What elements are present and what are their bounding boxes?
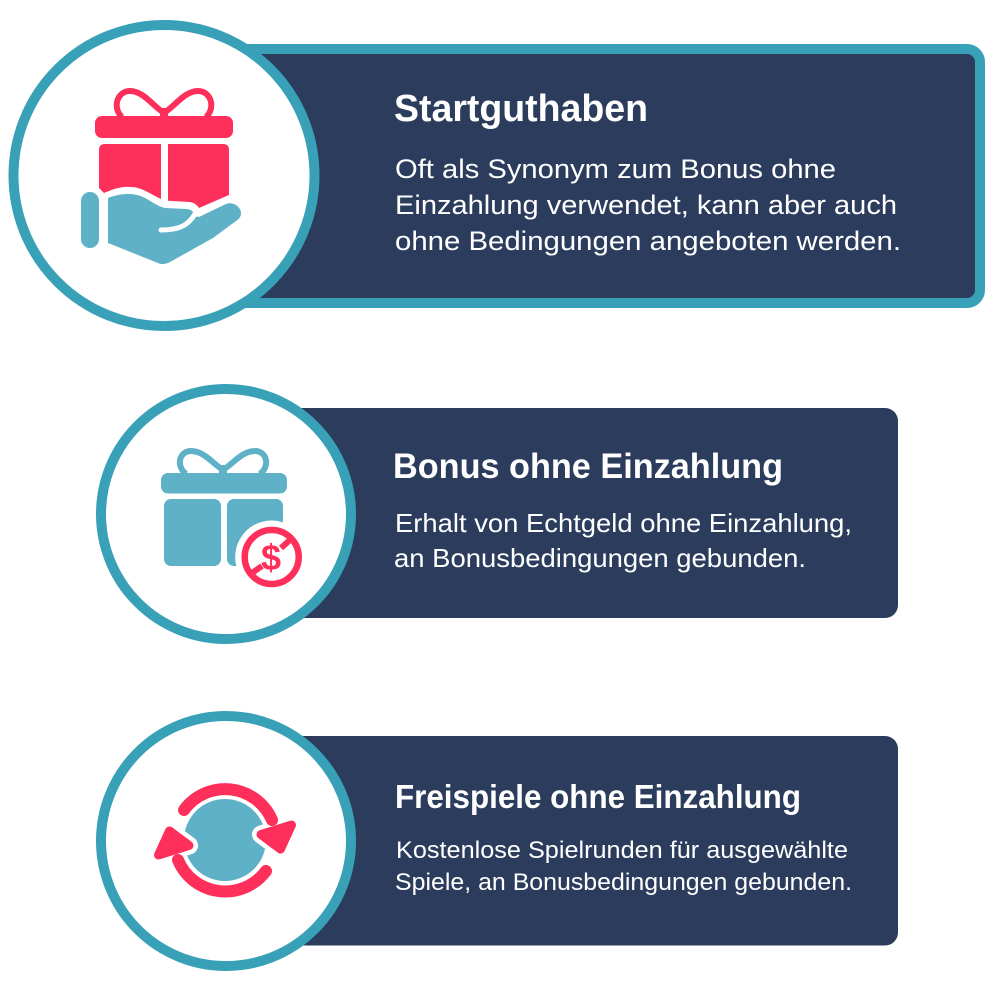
text block: Startguthaben description bbox=[395, 154, 901, 256]
card: Bonus ohne Einzahlung bbox=[101, 389, 898, 639]
heading: Startguthaben: Startguthaben bbox=[394, 88, 648, 130]
panel: Bonus ohne Einzahlung background bbox=[226, 408, 898, 618]
text block: Bonus ohne Einzahlung description: an Bonusbedingungen gebunden. bbox=[394, 543, 806, 573]
circle: Freispiele ohne Einzahlung icon badge bbox=[101, 716, 351, 966]
text block: Freispiele ohne Einzahlung description bbox=[395, 837, 852, 896]
icon: gift on open hand bbox=[81, 91, 241, 264]
text block: Bonus ohne Einzahlung description bbox=[394, 508, 852, 573]
text block: Startguthaben description: Einzahlung verwendet, kann aber auch bbox=[395, 190, 897, 220]
icon: circular arrows around disc bbox=[158, 789, 292, 892]
text block: Bonus ohne Einzahlung description: Erhalt von Echtgeld ohne Einzahlung, bbox=[395, 508, 852, 538]
card: Startguthaben bbox=[14, 25, 980, 326]
circle: Bonus ohne Einzahlung icon badge bbox=[101, 389, 351, 639]
text block: Freispiele ohne Einzahlung description: Spiele, an Bonusbedingungen gebunden. bbox=[395, 869, 852, 896]
panel: Freispiele ohne Einzahlung background bbox=[226, 736, 898, 946]
icon: gift with no-money badge bbox=[161, 451, 308, 594]
heading: Bonus ohne Einzahlung: Bonus ohne Einzahlung bbox=[393, 447, 783, 486]
text block: Startguthaben description: Oft als Synonym zum Bonus ohne bbox=[395, 154, 836, 184]
heading: Freispiele ohne Einzahlung: Freispiele ohne Einzahlung bbox=[395, 778, 801, 815]
panel: Startguthaben background bbox=[150, 49, 980, 303]
text block: Freispiele ohne Einzahlung description: Kostenlose Spielrunden für ausgewählte bbox=[396, 837, 848, 864]
text block: Startguthaben description: ohne Bedingungen angeboten werden. bbox=[395, 226, 901, 256]
circle: Startguthaben icon badge bbox=[14, 25, 314, 326]
icon: gift with no-money badge: $ bbox=[261, 537, 281, 578]
card: Freispiele ohne Einzahlung bbox=[101, 716, 898, 966]
